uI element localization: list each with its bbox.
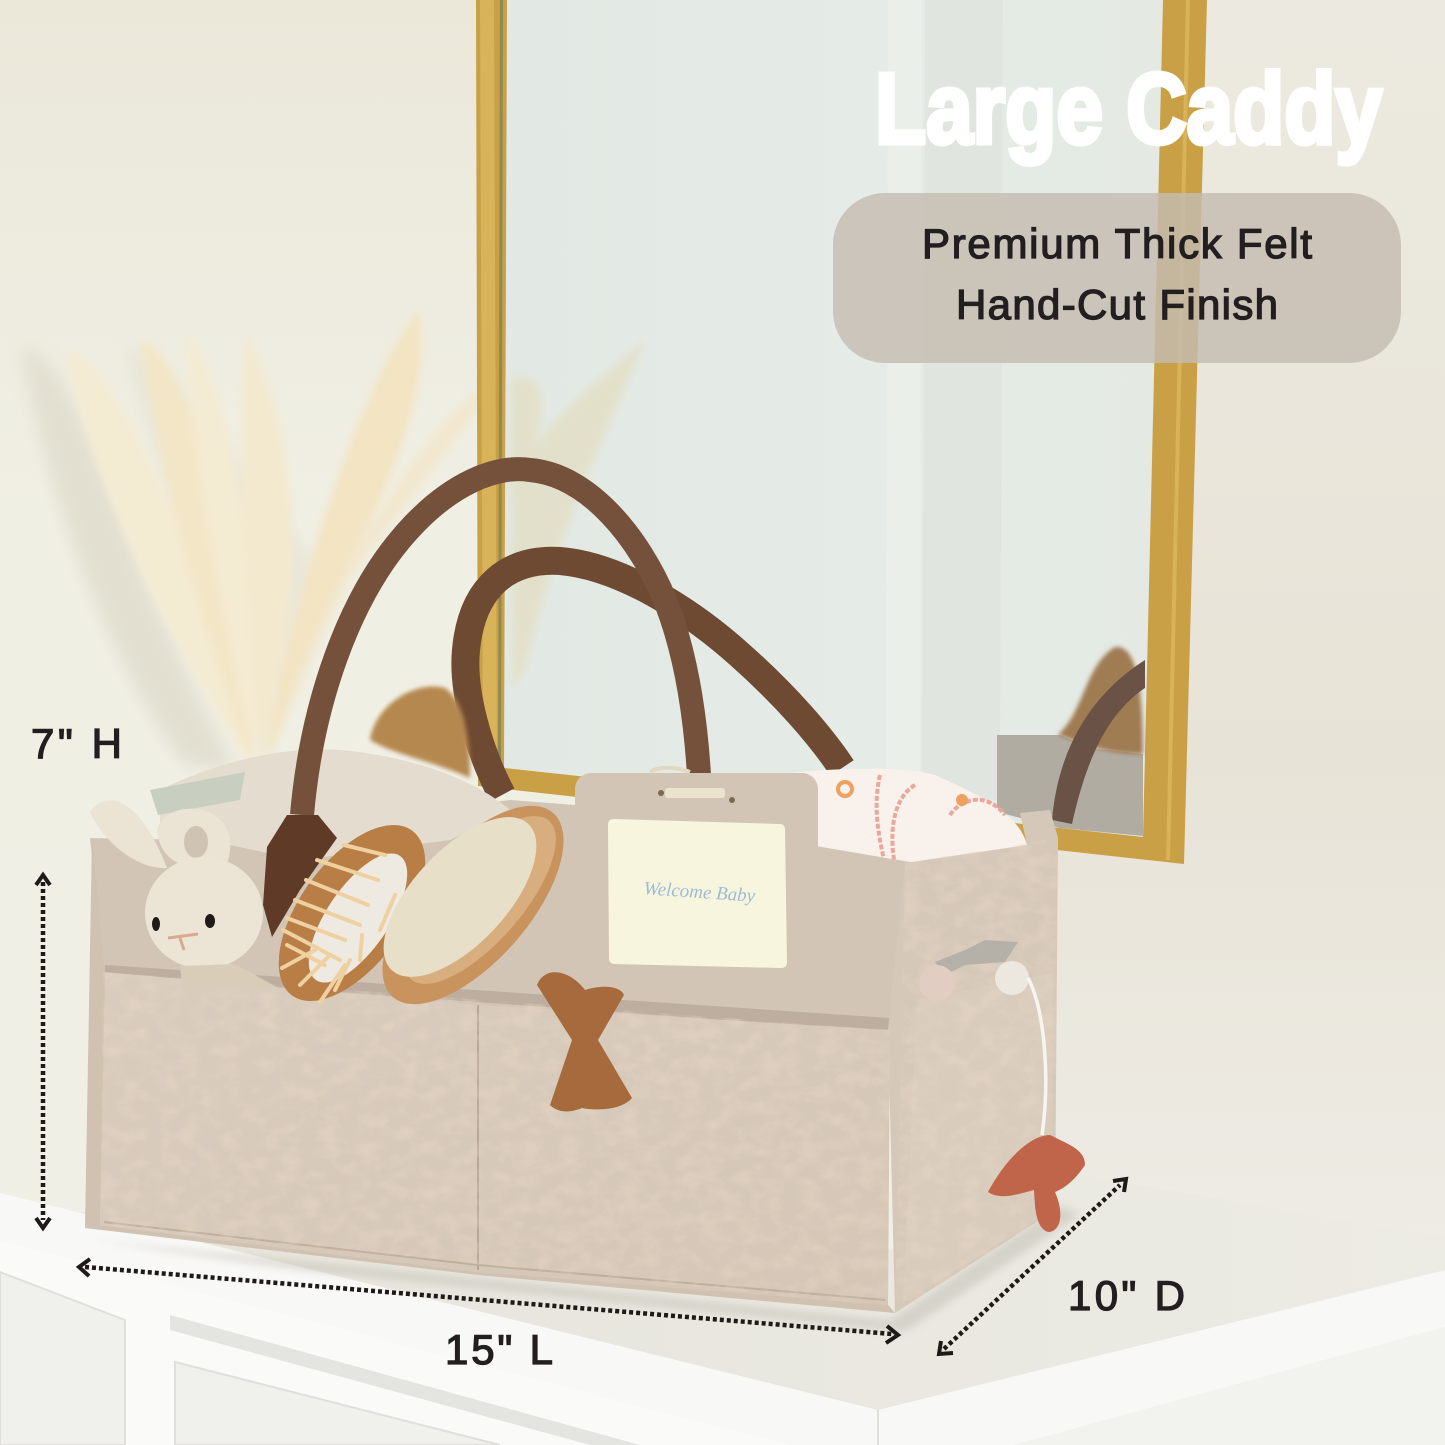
right wall xyxy=(1050,0,1445,1260)
drawer left xyxy=(0,1272,125,1445)
bristle head xyxy=(357,792,563,1002)
front handle xyxy=(302,469,699,815)
dresser front right xyxy=(1014,1327,1445,1445)
corner line xyxy=(877,1410,879,1445)
caddy back panel xyxy=(90,800,910,1040)
tag felt xyxy=(575,773,818,998)
back handle xyxy=(465,561,842,795)
dresser xyxy=(0,1173,1445,1445)
mirror reflection bands xyxy=(886,0,922,800)
front pocket xyxy=(100,972,890,1307)
mirror reflection band right xyxy=(922,0,1003,800)
frame dark inner line xyxy=(498,0,503,768)
front seam xyxy=(477,1005,479,1270)
diaper xyxy=(770,769,1027,868)
base stitching xyxy=(104,1222,885,1300)
bunny ear hole xyxy=(184,826,208,858)
mirror reflected caddy xyxy=(997,735,1143,836)
height arrow xyxy=(36,875,50,1228)
cloth accent xyxy=(150,772,245,815)
dresser lip xyxy=(0,1193,1445,1445)
mirror xyxy=(476,0,1207,864)
length arrow xyxy=(79,1259,898,1343)
length label: 15" L xyxy=(445,1326,553,1373)
cord xyxy=(1028,978,1046,1135)
callout xyxy=(833,193,1401,363)
pacifier xyxy=(988,1135,1085,1232)
bear toy xyxy=(370,687,470,778)
pampas grass decoration xyxy=(22,310,497,770)
wooden hair brush xyxy=(250,800,454,1026)
mirror reflected handle xyxy=(1052,660,1145,824)
clip xyxy=(935,940,1018,975)
callout line one: Premium Thick Felt xyxy=(922,220,1312,267)
dresser lip left xyxy=(0,1193,276,1290)
soft baby brush xyxy=(351,776,595,1034)
bunny toy xyxy=(90,800,282,990)
tag rivets xyxy=(658,790,735,803)
bunny nose xyxy=(168,934,198,950)
dresser front left xyxy=(0,1240,790,1445)
brush pins xyxy=(282,845,395,1002)
depth label: 10" D xyxy=(1068,1272,1185,1319)
tag window xyxy=(608,819,787,968)
height label: 7" H xyxy=(31,720,122,767)
pocket shadow xyxy=(105,965,890,1032)
tag string xyxy=(650,768,690,772)
handle patch xyxy=(263,815,337,937)
name tag xyxy=(575,768,818,998)
drawer middle xyxy=(175,1362,500,1445)
mirror reflected pampas xyxy=(510,340,645,690)
depth arrow xyxy=(939,1179,1126,1354)
bead white xyxy=(995,961,1029,995)
brush pad xyxy=(290,838,426,998)
bead pink xyxy=(919,965,955,1001)
tag handwriting: Welcome Baby xyxy=(643,878,756,907)
callout pill xyxy=(833,193,1401,363)
brush back xyxy=(250,800,454,1026)
caddy body xyxy=(85,749,1058,1313)
mirror frame xyxy=(476,0,1207,864)
bow xyxy=(537,972,632,1111)
cloth in caddy xyxy=(160,749,510,860)
mirror glass xyxy=(504,0,1163,837)
felt texture xyxy=(100,838,1058,1313)
mirror reflected bear xyxy=(1058,647,1143,754)
bunny body xyxy=(180,964,282,990)
callout line two: Hand-Cut Finish xyxy=(956,281,1278,328)
caddy shadow xyxy=(90,1205,1080,1332)
pampas shadow xyxy=(22,345,315,770)
pacifier clip xyxy=(919,940,1046,1135)
pampas plumes xyxy=(65,310,497,765)
tag leather strip xyxy=(665,788,725,798)
bunny eyes xyxy=(152,914,215,931)
dresser top xyxy=(80,1173,1445,1410)
brush handle xyxy=(351,776,595,1034)
right side panel xyxy=(888,810,1058,1313)
bunny ears xyxy=(90,800,230,873)
diaper pattern xyxy=(838,775,1005,865)
frame highlight xyxy=(480,0,1190,860)
bunny head xyxy=(145,857,263,969)
drawer gap xyxy=(170,1315,640,1445)
base strip xyxy=(85,838,895,1313)
diaper body xyxy=(770,769,1027,868)
side pocket xyxy=(903,973,1053,1303)
brush inner xyxy=(379,793,581,1007)
